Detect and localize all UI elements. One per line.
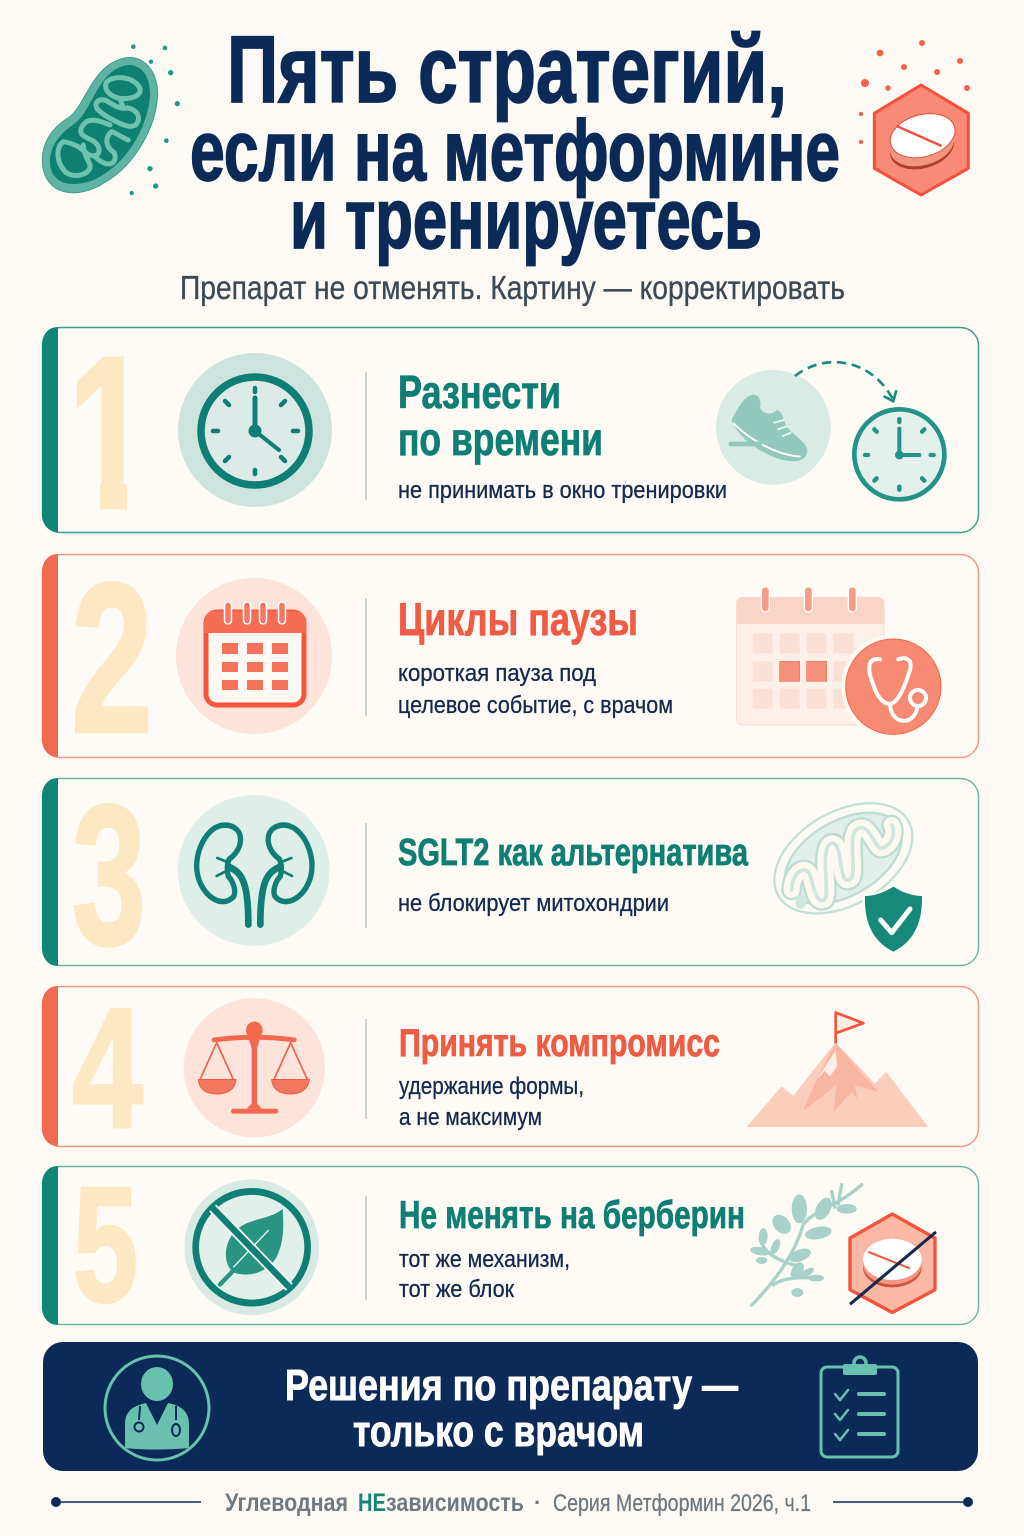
- heading: SGLT2 как альтернатива: [398, 832, 749, 874]
- description: [399, 1246, 570, 1303]
- footer: Углеводная: [225, 1489, 348, 1517]
- number 5: 5: [73, 1153, 138, 1336]
- banner text: только с врачом: [353, 1407, 644, 1456]
- panel: strategy 2: [42, 539, 978, 778]
- panel: strategy 5: [42, 1153, 978, 1336]
- number 4: 4: [72, 973, 143, 1164]
- footer: [51, 1489, 973, 1517]
- icon: mountain with flag: [748, 1012, 927, 1126]
- description: удержание формы,: [399, 1073, 584, 1100]
- heading: по времени: [398, 413, 603, 465]
- number 3: 3: [72, 764, 146, 987]
- panel: strategy 3: [42, 764, 978, 987]
- title: и тренируетесь: [290, 172, 762, 267]
- description: а не максимум: [399, 1104, 542, 1131]
- banner: doctor note: [43, 1342, 978, 1471]
- icon: mitochondrion with shield: [755, 780, 932, 952]
- heading: [398, 366, 603, 465]
- panel: strategy 4: [42, 973, 978, 1164]
- footer: зависимость: [386, 1489, 524, 1517]
- banner text: [285, 1361, 738, 1456]
- icon: clipboard checklist: [821, 1357, 898, 1457]
- description: [399, 1073, 584, 1131]
- icon: no leaf: [184, 1179, 319, 1315]
- footer: НЕ: [358, 1489, 386, 1517]
- icon: calendar: [176, 578, 332, 734]
- number 1: 1: [68, 312, 150, 555]
- description: не блокирует митохондрии: [398, 890, 669, 917]
- number 2: 2: [71, 539, 153, 778]
- description: [398, 660, 673, 719]
- description: тот же механизм,: [399, 1246, 570, 1273]
- description: целевое событие, с врачом: [398, 692, 673, 719]
- icon: calendar with stethoscope: [737, 587, 945, 739]
- footer: ·: [534, 1490, 541, 1515]
- heading: Не менять на берберин: [399, 1194, 745, 1237]
- title: [190, 17, 840, 267]
- banner text: Решения по препарату —: [285, 1361, 738, 1410]
- icon: pill in red hexagon: [859, 40, 970, 195]
- icon: shoe to clock: [716, 362, 944, 499]
- description: не принимать в окно тренировки: [398, 477, 727, 504]
- heading: Разнести: [398, 366, 561, 418]
- icon: scales: [184, 998, 325, 1137]
- subtitle: Препарат не отменять. Картину — корректировать: [180, 269, 845, 306]
- footer: Серия Метформин 2026, ч.1: [553, 1490, 811, 1517]
- description: короткая пауза под: [398, 660, 596, 687]
- title: Пять стратегий,: [227, 17, 787, 123]
- panel: strategy 1: [42, 326, 980, 534]
- icon: mitochondrion: [42, 44, 180, 195]
- icon: herb branch and crossed pill: [749, 1185, 936, 1313]
- description: тот же блок: [399, 1276, 514, 1303]
- heading: Циклы паузы: [398, 593, 638, 645]
- icon: kidneys: [178, 795, 330, 946]
- heading: Принять компромисс: [399, 1022, 720, 1065]
- icon: doctor: [105, 1356, 209, 1460]
- icon: clock: [178, 353, 332, 507]
